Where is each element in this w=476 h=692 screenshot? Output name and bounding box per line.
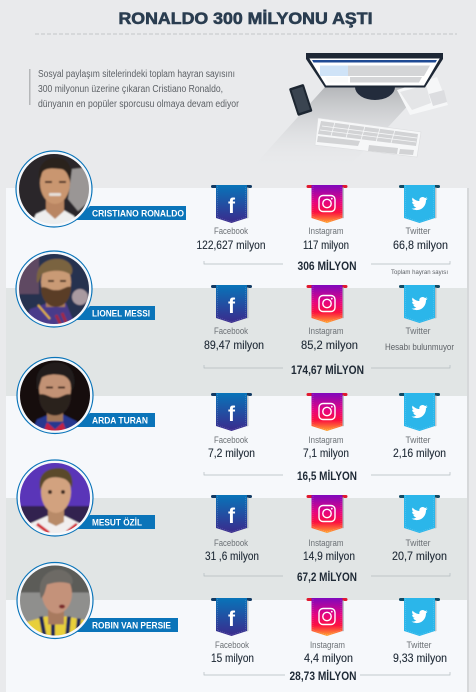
stats row: 89,47 milyon [204, 339, 264, 352]
player: Mesut Özil [17, 460, 450, 584]
portrait: Robin van Persie [17, 562, 93, 638]
stats row: 117 milyon [303, 239, 349, 252]
stats row [196, 226, 448, 252]
portrait: Mesut Özil [17, 460, 93, 536]
stats row: Hesabı bulunmuyor [385, 342, 454, 352]
stats row [205, 538, 447, 563]
stats row: 7,1 milyon [303, 447, 349, 460]
stats row [208, 435, 446, 460]
stats row: Twitter [406, 226, 431, 236]
name tag: Lionel Messi [75, 306, 155, 320]
total: 67,2 MİLYON [297, 569, 357, 584]
stats row [211, 640, 447, 665]
total [204, 468, 450, 483]
stats row: Twitter [406, 435, 431, 445]
stats row: 66,8 milyon [393, 239, 448, 252]
total: 174,67 MİLYON [291, 362, 364, 377]
stats row: Instagram [308, 226, 344, 236]
portrait: Arda Turan [17, 358, 93, 434]
stats row: Twitter [406, 640, 432, 650]
stats row: 15 milyon [211, 652, 254, 665]
stats row: Facebook [214, 226, 249, 236]
stats row: 2,16 milyon [393, 447, 446, 460]
stats row: Instagram [308, 435, 344, 445]
title: RONALDO 300 MİLYONU AŞTI [118, 9, 372, 28]
stats row: Instagram [308, 538, 344, 548]
total: 306 MİLYON [298, 258, 357, 273]
name tag: Arda Turan [75, 413, 155, 427]
stats row: Twitter [406, 326, 431, 336]
stats row: 20,7 milyon [392, 550, 447, 563]
social ribbons: f [228, 608, 236, 631]
player: Cristiano Ronaldo [16, 151, 450, 276]
stats row: 4,4 milyon [304, 652, 353, 665]
stats row [204, 326, 454, 352]
total: Toplam hayran sayısı [391, 269, 448, 276]
stats row: 7,2 milyon [208, 447, 255, 460]
total [204, 258, 450, 276]
name tag: Arda Turan: ARDA TURAN [92, 416, 148, 426]
stats row: 9,33 milyon [393, 652, 447, 665]
intro text block [29, 69, 240, 110]
social ribbons: f [228, 195, 236, 218]
total [204, 668, 450, 683]
stats row: 31 ,6 milyon [205, 550, 259, 563]
player: Robin van Persie [17, 562, 450, 683]
stats row: Facebook [214, 435, 249, 445]
social ribbons [211, 285, 440, 323]
stats row: Facebook [215, 640, 250, 650]
stats row: Facebook [214, 326, 249, 336]
intro text block: Sosyal paylaşım sitelerindeki toplam hayran sayısını [38, 69, 235, 80]
player: Arda Turan [17, 358, 450, 483]
social ribbons [211, 393, 440, 431]
total [204, 362, 450, 377]
stats row: Twitter [406, 538, 431, 548]
name tag: Robin van Persie [75, 618, 178, 632]
intro text block: dünyanın en popüler sporcusu olmaya devam ediyor [38, 99, 240, 110]
name tag: Mesut Özil [75, 515, 155, 529]
illustration: computer desk [250, 53, 448, 170]
player: Lionel Messi [16, 251, 454, 377]
name tag: Mesut Özil: MESUT ÖZİL [92, 518, 142, 528]
name tag: Lionel Messi: LIONEL MESSI [92, 309, 150, 319]
social ribbons [211, 495, 440, 533]
stats row: 85,2 milyon [301, 339, 358, 352]
intro text block: 300 milyonun üzerine çıkaran Cristiano Ronaldo, [38, 84, 223, 95]
name tag: Robin van Persie: ROBIN VAN PERSIE [92, 621, 171, 631]
total: 16,5 MİLYON [297, 468, 357, 483]
total [204, 569, 450, 584]
portrait: Lionel Messi [16, 251, 92, 327]
name tag: Cristiano Ronaldo [75, 206, 186, 220]
social ribbons [211, 598, 440, 636]
social ribbons: f [228, 295, 236, 318]
stats row: Facebook [214, 538, 249, 548]
stats row: Instagram [308, 326, 344, 336]
total: 28,73 MİLYON [290, 668, 357, 683]
stats row: 14,9 milyon [303, 550, 355, 563]
name tag: Cristiano Ronaldo: CRISTIANO RONALDO [92, 209, 184, 219]
row bands [6, 188, 469, 692]
stats row: 122,627 milyon [196, 239, 266, 252]
stats row: Instagram [310, 640, 345, 650]
social ribbons: f [228, 403, 236, 426]
social ribbons: f [228, 505, 236, 528]
social ribbons [211, 185, 440, 223]
portrait: Cristiano Ronaldo [16, 151, 92, 227]
